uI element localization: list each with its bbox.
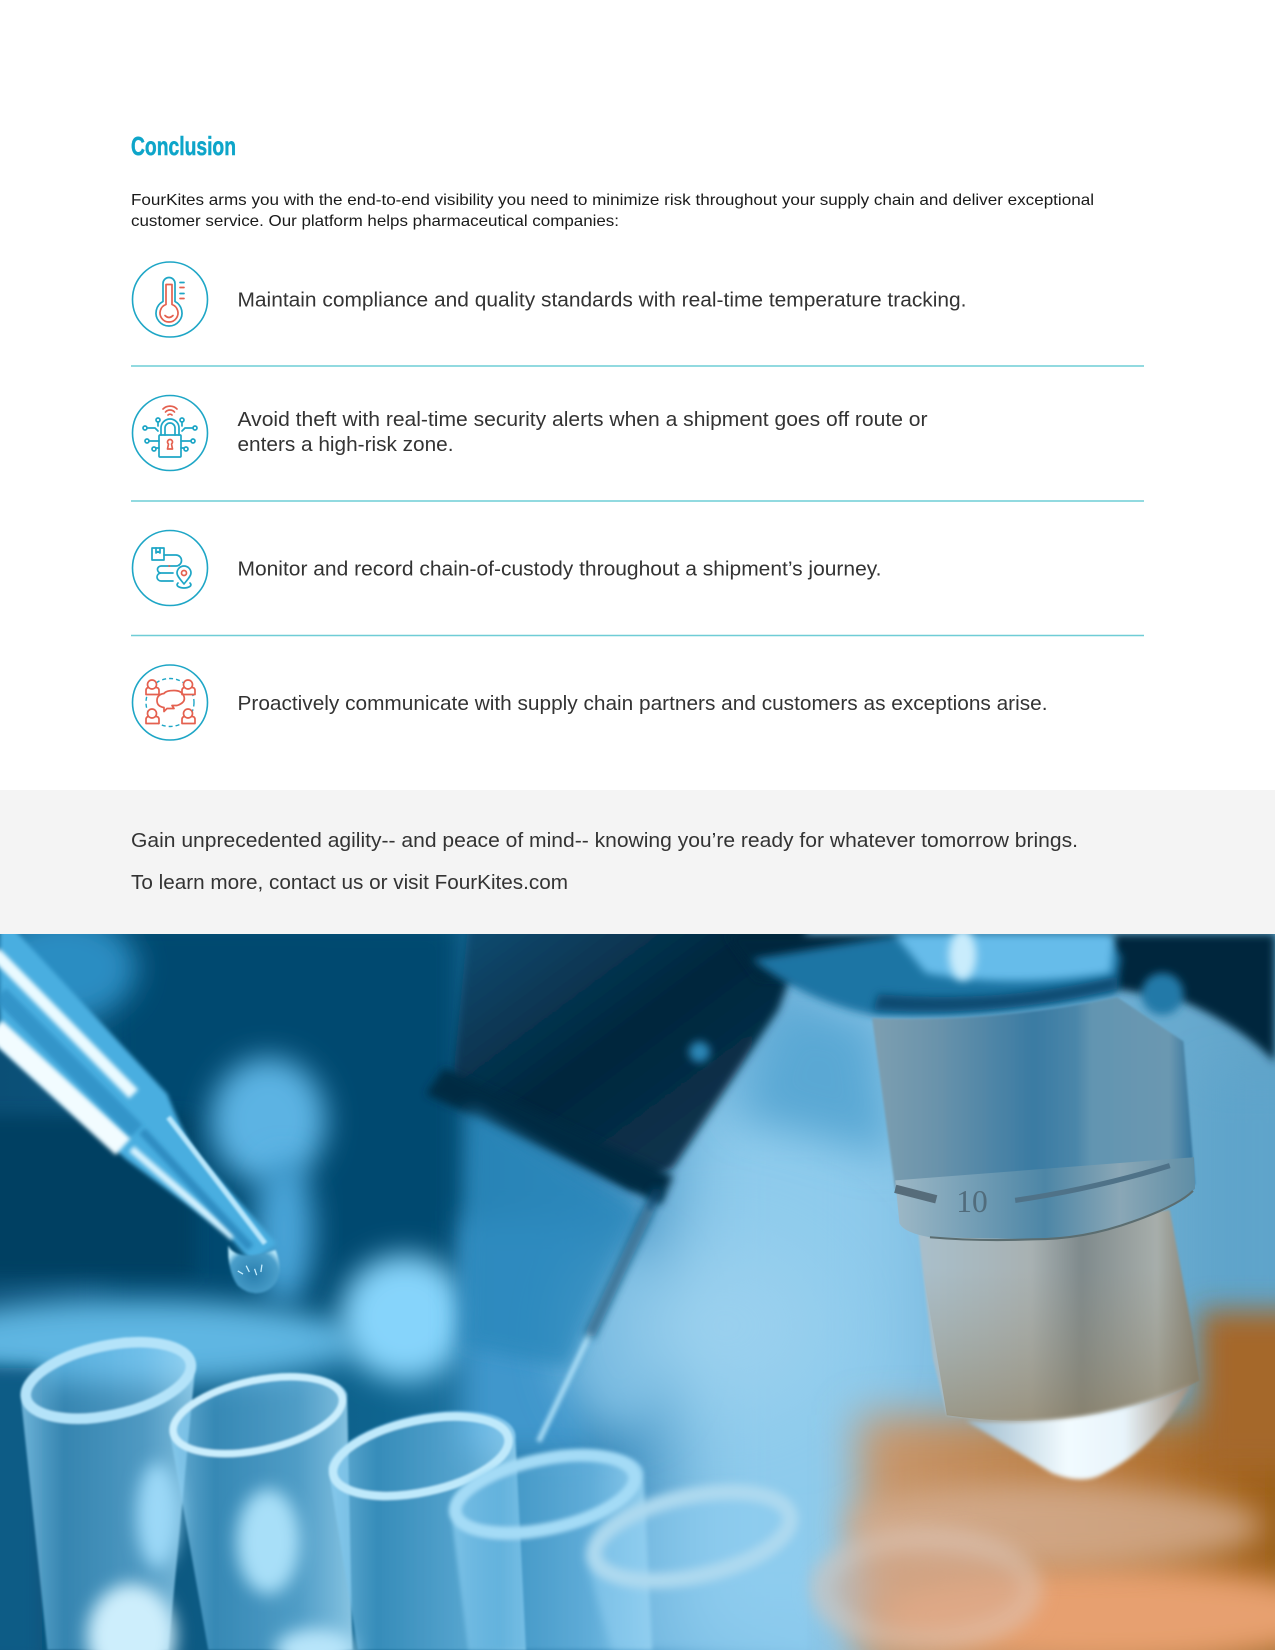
microscope turret [726, 930, 1275, 1062]
icon: people around chat bubbles [132, 665, 208, 740]
item 1: temperature tracking [132, 262, 966, 337]
item 2: security alerts [132, 396, 928, 470]
pipette with droplet [0, 926, 280, 1293]
intro paragraph: FourKites arms you with the end-to-end visibility you need to minimize risk throughout your supply chain and deliver exceptional [131, 192, 1094, 209]
intro paragraph: customer service. Our platform helps pharmaceutical companies: [131, 213, 619, 230]
item text: Proactively communicate with supply chain partners and customers as exceptions arise. [238, 693, 1048, 715]
item text: Avoid theft with real-time security alerts when a shipment goes off route or [238, 409, 928, 431]
microscope objective lens with "10" marking [872, 997, 1199, 1479]
item text: Maintain compliance and quality standards with real-time temperature tracking. [238, 290, 966, 312]
blurred background shapes [0, 915, 1275, 1650]
panel: grey call to action band [0, 790, 1275, 934]
item 3: chain of custody [132, 530, 882, 606]
heading: Conclusion: Conclusion [131, 131, 236, 161]
icon: package route to pin [132, 530, 208, 606]
blurred orange foreground [821, 1310, 1275, 1650]
item text: Monitor and record chain-of-custody throughout a shipment’s journey. [238, 558, 882, 580]
item text [238, 409, 928, 456]
icon: padlock with circuit lines [132, 396, 208, 470]
closing statement: Gain unprecedented agility-- and peace of mind-- knowing you’re ready for whatever tomorrow brings. [131, 830, 1078, 852]
item text: enters a high-risk zone. [238, 434, 454, 456]
intro paragraph [131, 192, 1094, 230]
icon: thermometer [132, 262, 208, 337]
test tubes [19, 1329, 810, 1650]
contact line: To learn more, contact us or visit FourKites.com [131, 872, 568, 894]
photo: pipette, test tubes and microscope objective [0, 934, 1275, 1650]
blurred microscope arm [426, 923, 810, 1442]
microscope objective lens with "10" marking: 10 [956, 1184, 988, 1219]
item 4: communication [132, 665, 1048, 740]
